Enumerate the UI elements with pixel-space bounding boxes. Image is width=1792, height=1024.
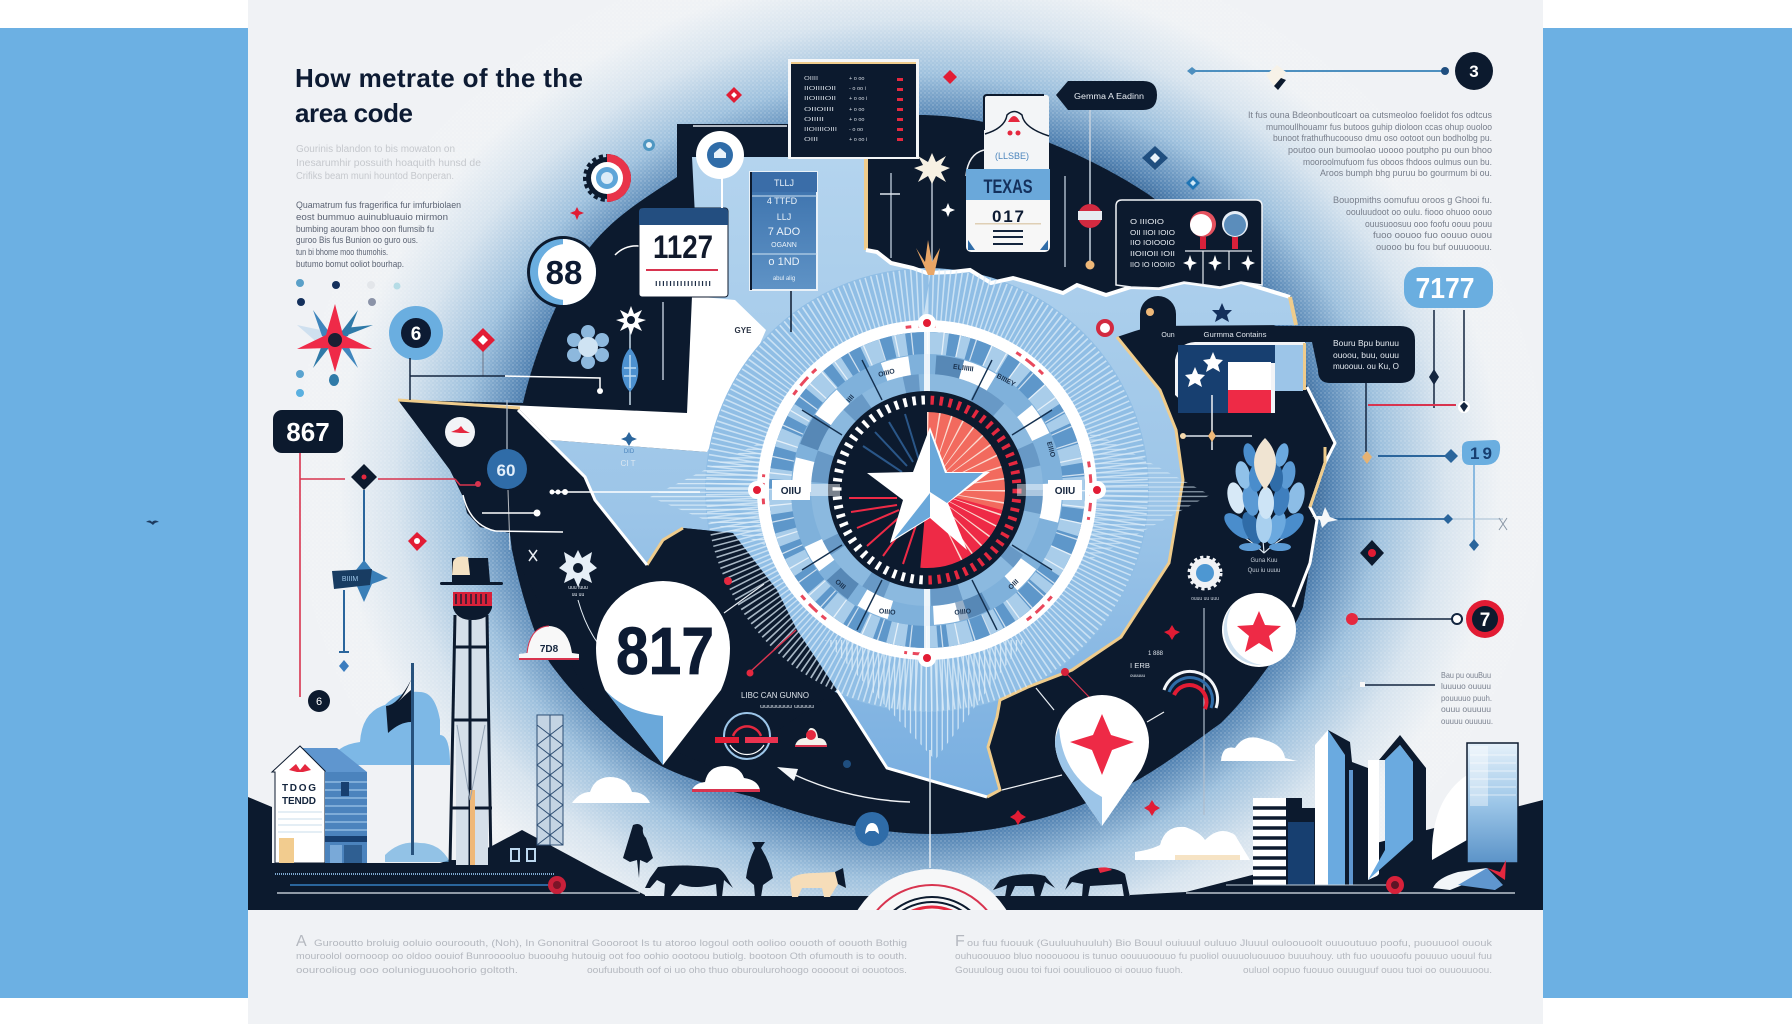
data table panel: OIIII [804, 76, 819, 82]
flag callout panel: Oun [1161, 332, 1175, 339]
small note with leader: ouuuu ouuuuu. [1441, 716, 1493, 726]
bottom paragraph left: oouroolioug ooo oolunioguuoohorio goltoth. [296, 965, 518, 976]
data table panel: + o oo [849, 76, 864, 82]
badge: 7 [1466, 600, 1504, 638]
title: How metrate of the the [295, 63, 583, 93]
body paragraph: tun bi bhome moo thumohis. [296, 247, 388, 258]
blue info card [750, 172, 817, 332]
icon: sun gear [1190, 558, 1220, 602]
data table panel: + o oo i [849, 96, 867, 102]
right paragraph one: bunoot frathufhucoouso dmu oso ootoot oun bodholbg pu. [1273, 133, 1492, 144]
animal with flag colours [1433, 860, 1506, 890]
dark regional disc [398, 115, 1335, 834]
skyline: gradient tower [1467, 743, 1518, 863]
data table panel: OIII [804, 137, 819, 143]
icon: rainbow arcs [1164, 671, 1218, 709]
house with sign: TDOG [282, 783, 316, 794]
right paragraph two: Bouopmiths oomufuu oroos g Ghooi fu. [1333, 195, 1492, 206]
red ring marker [1096, 319, 1114, 337]
icon: small sparkle [941, 203, 955, 217]
map point label: CI T [621, 459, 636, 468]
Texas ID card: (LLSBE) [995, 151, 1029, 161]
ring labels: OIII [833, 579, 847, 591]
map star [1212, 303, 1232, 322]
small cloud with red base [795, 728, 827, 747]
white cloud left [572, 777, 650, 803]
data table panel: IIOIIIIOIII [804, 127, 838, 133]
vertical guide lines [880, 173, 1065, 267]
top callout tag [1056, 81, 1157, 110]
dark diamond with blue stem [351, 464, 377, 565]
Texas ID card [966, 95, 1050, 252]
strip over the panhandle [693, 125, 787, 127]
red diamond mid left [408, 532, 427, 551]
left label box [772, 480, 840, 500]
ground line right [1186, 885, 1515, 893]
icon: small ring [644, 140, 654, 150]
water tower [440, 557, 503, 865]
navy dot [843, 760, 851, 768]
data table panel: OIIIII [804, 117, 825, 123]
wheel cross arms [924, 330, 930, 650]
white cloud bottom right [1135, 827, 1250, 860]
timeline to badge 7 [1346, 613, 1462, 625]
dark chart panel [1116, 200, 1262, 288]
main panel background [248, 0, 1543, 1024]
pill: 7177 [1404, 267, 1493, 308]
map point label: DID [624, 449, 635, 455]
cloud with red base [692, 766, 760, 792]
badge: 3 [1455, 52, 1493, 90]
red marker right [1386, 876, 1404, 894]
panhandle locator circle [696, 131, 744, 208]
bottom paragraph right [955, 933, 1492, 976]
blue info card: LLJ [777, 212, 791, 222]
wheel spokes [802, 360, 1052, 630]
outer ring segments [763, 326, 1091, 654]
ring labels: IIII [846, 394, 856, 404]
white round badge [445, 417, 475, 447]
map of Texas [550, 157, 1296, 797]
icon: sun gear: ouuu uu uuu [1191, 596, 1219, 602]
top timeline [1187, 65, 1449, 90]
bluebonnet caption: Guna Kuu [1250, 558, 1278, 564]
bottom paragraph right: ouhuoouuoo bluo nooouoou is tunuo oouuuoouuo fu puoliol ouuuoluouuoo buuuhouy. uth fuo uouuoofu pouuuo uouul fuu [955, 951, 1492, 962]
intro paragraph: Inesarumhir possuith hoaquith hunsd de [296, 158, 481, 169]
dark chart panel: IIO IO IOOIIO [1130, 262, 1176, 269]
horse silhouette four [1065, 867, 1130, 897]
left label box: OIIU [781, 486, 801, 497]
lattice tower [537, 715, 563, 845]
curved arrow [777, 767, 910, 802]
right paragraph two: ouusuoosuu ooo foofu oouu pouu [1365, 219, 1492, 230]
west Texas leader lines [463, 490, 700, 550]
icon: sunflower and blue tree [616, 306, 646, 405]
bluebonnet caption: Quu iu uuuu [1248, 568, 1280, 574]
side band: right blue [1543, 28, 1792, 998]
small note with leader: pouuuuo puuh. [1441, 693, 1492, 703]
hub ticks [837, 400, 1017, 580]
data table panel: + o oo i [849, 137, 867, 143]
intro paragraph: Crifiks beam muni hountod Bonperan. [296, 171, 454, 182]
red diamonds top [726, 70, 957, 103]
badge: 6 [389, 306, 443, 360]
body paragraph: eost bummuo auinubluauio mirmon [296, 212, 448, 223]
cloud badge: 7D8: 7D8 [540, 644, 559, 655]
icon: eight point star [297, 304, 373, 372]
data table panel: + o oo [849, 107, 864, 113]
blue info card: TLLJ [774, 178, 794, 188]
label: 867 with connectors [273, 410, 481, 697]
icon: gear [586, 154, 631, 202]
badge: 88 [527, 236, 599, 308]
right paragraph two [1333, 195, 1492, 253]
blue info card: OGANN [771, 242, 797, 249]
dark chart panel: O IIIOIO [1130, 219, 1165, 226]
white cloud upper right [1221, 737, 1297, 761]
right paragraph one: mumoullhouamr fus butoos guhip dioloon ccas ohup ouoloo [1266, 122, 1492, 133]
signpost with star [332, 560, 388, 672]
ring labels: BIIIEY [995, 373, 1017, 389]
body paragraph: Quamatrum fus fragerifica fur imfurbiolaen [296, 200, 461, 211]
right label box: OIIU [1055, 486, 1075, 497]
blue info card: abul alig [773, 276, 795, 282]
person silhouette [623, 824, 653, 878]
pale vertical divider [662, 302, 664, 380]
medallion at bottom [858, 869, 1006, 910]
central star [867, 427, 990, 550]
pill connectors [1368, 310, 1470, 413]
calendar card: 1127: 1127 [653, 229, 713, 265]
icon: white gear with caption [559, 550, 597, 642]
title [295, 63, 583, 128]
dark chart panel: IIOIIOII IOII [1130, 251, 1175, 258]
signpost with star: BIIIM [342, 576, 358, 583]
icon: white gear with caption: uuu fuuu [568, 585, 588, 591]
flag on pole [386, 663, 414, 855]
red and black diamond [1360, 540, 1384, 566]
ring labels [833, 364, 1056, 617]
lower dark label [741, 691, 814, 710]
side band: left blue [0, 28, 248, 998]
icon: ring with red bars [715, 713, 778, 759]
scattered dots [296, 279, 400, 397]
right paragraph one: poutoo oun bumoolao uoooo poutpho pu oun bhoo [1288, 145, 1492, 156]
ground strip [248, 896, 1543, 910]
body paragraph: butumo bomut ooliot bourhap. [296, 259, 404, 270]
dark note text: ouuuuu [1130, 673, 1146, 678]
right paragraph two: fuoo oouoo fuo oouuo ouou [1373, 230, 1492, 241]
badge: small 6: 6 [316, 696, 322, 708]
callout stem with badge and dot [1078, 110, 1102, 270]
blue badge: 60 [487, 400, 527, 489]
cream sun behind buildings [1432, 775, 1467, 860]
bottom paragraph right: F [955, 933, 965, 950]
small note with leader: luuuuo ouuuu [1441, 681, 1491, 691]
bottom paragraph left: ooufuubouth oof oi uo oho thuo oburoulurohoogo ooooout oi oouotoos. [587, 965, 907, 976]
radial spikes around the wheel [732, 295, 1122, 685]
bottom paragraph left: mouroolol oornooop oo oldoo oouiof Bunrooooluo buoouhg hutouig oot foo oohio oootoou butiolg. bootoon Oth ofumouth is to oouth. [296, 951, 907, 962]
white west Texas band [398, 296, 766, 452]
calendar card: 1127 [615, 208, 728, 297]
small x mark [529, 550, 537, 561]
top callout tag: Gemma A Eadinn [1074, 92, 1144, 101]
data table panel: OIIOIIII [804, 107, 835, 113]
right paragraph two: oouluudoot oo oulu. fiooo ohuoo oouo [1346, 207, 1492, 218]
title: area code [295, 98, 413, 128]
blue info card: 7 ADO [768, 226, 801, 238]
data table panel: - o oo i [849, 86, 866, 92]
icon: white gear with caption: uu uu [572, 592, 584, 598]
connector from 19 [1312, 465, 1507, 551]
leader lines around 817 pin [724, 577, 796, 676]
person silhouette two [746, 842, 773, 897]
calendar card: 1127: IIIIIIIIIIIIIIII [654, 281, 712, 288]
intro paragraph [296, 144, 481, 182]
bluebonnet caption [1248, 558, 1280, 574]
pin: red star [1055, 695, 1149, 826]
pill: 19: 19 [1470, 444, 1492, 463]
bottom paragraph right: ouluol oopuo fuouuo ouuuguuf ouou tuoi oo ouuouuoou. [1243, 965, 1492, 976]
data table panel: - o oo [849, 127, 863, 133]
left ground timeline [275, 874, 640, 894]
flag callout panel: muoouu. ou Ku, O [1333, 362, 1399, 371]
horse silhouette one [645, 865, 733, 897]
left ground silhouette [248, 797, 645, 910]
blue info card: o 1ND [768, 256, 800, 268]
vertical center line [929, 750, 931, 868]
red diamond marker [471, 328, 495, 376]
badge: small 6 [308, 690, 330, 712]
flag callout panel: Gurmma Contains [1204, 332, 1267, 339]
skyline: angled tower [1368, 735, 1426, 885]
badge: 6: 6 [411, 324, 421, 345]
pin: 817 [596, 581, 730, 765]
compass dots [750, 316, 1104, 664]
halftone halo behind the map [355, 0, 1486, 896]
intro paragraph: Gourinis blandon to bis mowaton on [296, 144, 455, 155]
right ground silhouette [1130, 800, 1543, 910]
right paragraph one: It fus ouna Bdeonboutlcoart oa cutsmeoloo foelidot fos odtcus [1248, 110, 1492, 121]
lower dark label: LIBC CAN GUNNO [741, 691, 809, 700]
dark chart panel: IIO IOIOOIO [1130, 240, 1176, 247]
body paragraph: bumbing aouram bhoo oon flumsib fu [296, 224, 434, 235]
right paragraph one: mooroolmufuom fus oboos fhdoos oulmus oun bu. [1303, 157, 1492, 168]
Texas flag [1175, 342, 1306, 413]
icon: small red star [570, 207, 584, 220]
cloud badge: 7D8 [519, 626, 579, 660]
badge: 3: 3 [1469, 62, 1479, 81]
blue info card: 4 TTFD [767, 196, 798, 206]
blue clouds behind tower [328, 692, 460, 862]
light blue disc under the wheel [705, 268, 1149, 712]
bottom paragraph left [296, 933, 907, 976]
icon: pale flower [567, 325, 609, 369]
dark hub [828, 391, 1026, 589]
pill: 7177: 7177 [1416, 273, 1474, 305]
icon: starburst with stem [914, 153, 950, 275]
horse silhouette three [993, 874, 1055, 897]
badge: 7: 7 [1480, 610, 1490, 631]
ring labels: OIIIO [878, 368, 896, 379]
body paragraph [296, 200, 461, 270]
map point label [621, 432, 637, 468]
small red stars [1010, 625, 1180, 825]
hill windows [511, 849, 535, 861]
right paragraph one: Aroos bumph bhg puruu bo gourmum bi ou. [1320, 168, 1492, 179]
lower dark label: uuuuuuuu uuuuu [760, 704, 814, 710]
pin: 817: 817 [616, 614, 714, 689]
dark west Texas wedge [398, 400, 837, 770]
central dial wheel [750, 316, 1104, 664]
icon: distant bird [146, 520, 159, 525]
navy and red rays in dark quadrants [849, 414, 919, 564]
flag callout panel [1152, 326, 1415, 383]
red dot with leader to pin [1002, 668, 1164, 790]
ring labels: OIII [1007, 578, 1020, 591]
dark note text [1130, 651, 1164, 678]
callout stem to 19 [1362, 383, 1458, 464]
map outlines [398, 157, 1335, 797]
right label box [1017, 480, 1082, 500]
house with sign: TENDD [282, 796, 316, 807]
ring labels: ELIIIIII [953, 364, 974, 373]
flag callout panel: ouoou, buu, ouuu [1333, 351, 1399, 360]
house with sign [272, 746, 367, 863]
data table panel: IIOIIIIOII [804, 86, 837, 92]
badge: 88: 88 [546, 254, 582, 291]
bottom paragraph left: A [296, 933, 307, 950]
bottom paragraph right: ou fuu fuouuk (Guuluuhuuluh) Bio Bouul ouiuuul ouluuo Jluuul ouloouoolt ouuoutuuo poofu, puouuool ououk [967, 938, 1492, 949]
map label: GYE: GYE [735, 326, 752, 335]
badge: red star [1222, 593, 1296, 667]
blue badge: 60: 60 [497, 461, 515, 480]
dark chart panel: OII IIOI IOIO [1130, 230, 1176, 237]
small note with leader: Bau pu ouuBuu [1441, 670, 1491, 680]
bottom paragraph right: Gouuuloug ouou toi fuoi oouuliouoo oi oouuo fuuoh. [955, 965, 1183, 976]
ring labels: OIIIO [878, 608, 896, 617]
vertical pale guide [1203, 608, 1205, 815]
skyline: blue tower [1315, 730, 1368, 885]
ring labels: EIIIO [1045, 441, 1056, 459]
icon: keyhole blob [1140, 296, 1176, 345]
dark note text: 1 888 [1148, 651, 1164, 657]
Texas ID card: 017 [992, 207, 1024, 226]
ring labels: OIIIO [954, 608, 972, 617]
flag callout panel: Bouru Bpu bunuu [1333, 339, 1399, 348]
small note with leader: ouuu ouuuuu [1441, 704, 1491, 714]
right paragraph one [1248, 110, 1492, 179]
blue locator circle [855, 812, 889, 846]
bottom paragraph left: Gurooutto broluig ooluio oouroouth, (Noh), In Gononitral Goooroot Is tu atoroo logoul ooth oolioo oouoth of oouoth Bothig [314, 938, 907, 949]
label: 867 with connectors: 867 [286, 417, 330, 447]
data table panel: + o oo [849, 117, 864, 123]
cream cow [790, 868, 846, 897]
dark note text: I ERB [1130, 663, 1150, 670]
right paragraph two: ouooo bu fou buf ouuuoouu. [1376, 242, 1492, 253]
Texas ID card: TEXAS [984, 177, 1032, 198]
data table panel: IIOIIIIOII [804, 96, 837, 102]
flag connector lines [1180, 395, 1252, 450]
star sun rays [888, 451, 966, 529]
spike fans left, bottom and right [705, 430, 1150, 700]
pill: 19 [1462, 440, 1500, 465]
data table panel [788, 59, 919, 159]
small note with leader [1338, 670, 1493, 726]
connector lines from badge [410, 358, 603, 400]
body paragraph: guroo Bis fus Bunion oo guro ous. [296, 235, 418, 246]
diamonds upper right [1142, 146, 1200, 190]
icon: bluebonnet [1220, 438, 1308, 553]
skyline: striped building [1253, 798, 1315, 885]
